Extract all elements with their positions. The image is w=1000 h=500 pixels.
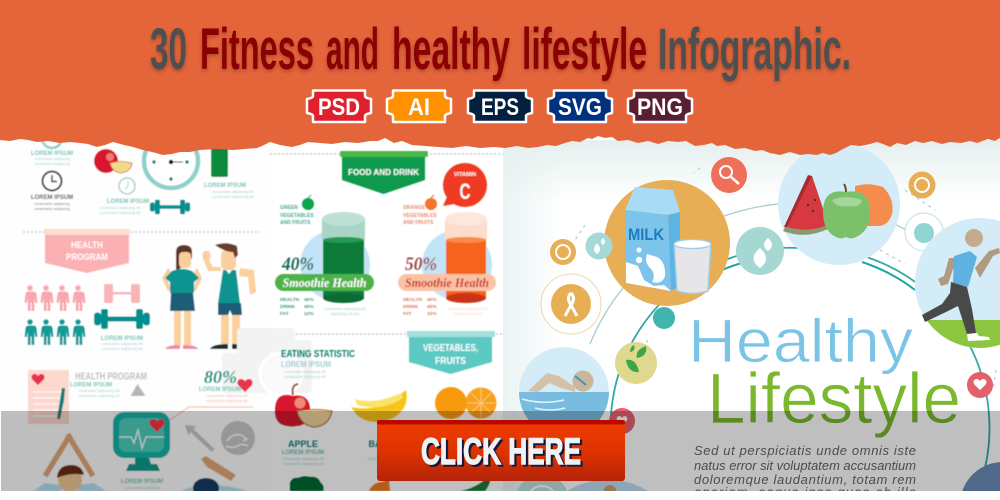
title: healthy	[392, 17, 510, 82]
text: green vegetables: GREEN	[280, 205, 298, 211]
panel: healthy lifestyle right	[503, 140, 1000, 500]
label: apple: LOREM IPSUM	[282, 450, 324, 456]
icon: heart circle small	[609, 408, 635, 434]
label: apple: APPLE	[288, 439, 318, 449]
watermark: grey camera	[222, 328, 312, 395]
badge: EPS	[468, 90, 532, 122]
button: click here	[377, 420, 625, 481]
text: orange vegetables: AND FRUITS	[403, 220, 434, 226]
panel: food and drink middle	[270, 151, 503, 491]
artwork collage	[0, 128, 1000, 500]
heading: health program: HEALTH PROGRAM	[75, 372, 147, 382]
heading: health program: consectetur adipiscing elit	[78, 394, 120, 398]
lorem label three: consectetur adipiscing elit	[99, 206, 141, 210]
icon: oranges	[435, 387, 496, 419]
heading: eating statistic: LOREM IPSUM	[281, 360, 331, 369]
banner: health program: HEALTH	[71, 240, 103, 250]
table: green stats: FAT	[280, 311, 289, 317]
heading: eating statistic: consectetur adipiscing elit	[284, 375, 326, 379]
outer thin ring	[590, 203, 920, 344]
icons: teal people	[25, 319, 86, 345]
banner: vegetables fruits: VEGETABLES,	[423, 343, 478, 354]
lorem label three: consectetur adipiscing elit	[99, 211, 141, 215]
circle: bottom blue figure	[567, 480, 648, 491]
badge: AI	[387, 90, 451, 122]
icon: apple with slice	[94, 149, 132, 173]
lorem label one: LOREM IPSUM	[31, 151, 73, 157]
label: apple	[282, 439, 324, 466]
figure: man	[202, 243, 256, 349]
table: green stats: 12%	[304, 311, 314, 317]
heading: health program: LOREM IPSUM	[70, 382, 112, 388]
icon: teal dumbbell	[94, 309, 150, 329]
table: green stats: 40%	[304, 297, 314, 303]
figure: swimmer	[528, 370, 594, 392]
top teal ring fragment	[41, 141, 63, 150]
stat: 50 percent: 50%	[405, 254, 437, 275]
heading: eating statistic: EATING STATISTIC	[281, 349, 355, 360]
icon: banana	[351, 390, 407, 422]
title: lifestyle	[522, 17, 647, 82]
torn orange header	[0, 0, 1000, 155]
badge: PSD	[307, 90, 371, 122]
pill: orange smoothie health: Smoothie Health	[405, 275, 489, 290]
title: Infographic.	[658, 17, 851, 82]
icon: watermelon	[783, 175, 830, 235]
table: orange stats: 45%	[427, 304, 437, 310]
label: apple: consectetur adipiscing elit	[282, 457, 324, 461]
lorem label six: consectetur adipiscing	[124, 486, 160, 490]
badge: AI: AI	[408, 94, 430, 121]
banner: food and drink	[340, 151, 428, 194]
stat: 80 percent: consectetur adipiscing elit	[206, 394, 248, 398]
table: green stats	[280, 297, 366, 317]
title: Fitness	[200, 17, 314, 82]
icon: large wall clock	[141, 150, 201, 191]
table: orange stats: consectetur adipiscing elit	[447, 307, 489, 311]
text block: lorem paragraph: aperiam, eaque ipsa quae ab illo	[694, 484, 916, 500]
badge: SVG: SVG	[558, 94, 602, 121]
icon: notepad and pen	[28, 370, 69, 424]
figure: yoga man	[33, 436, 106, 492]
icon: swim circle	[221, 421, 255, 455]
table: green stats: adipiscing elit sed	[331, 312, 359, 316]
stat: 80 percent: consectetur adipiscing elit	[206, 399, 248, 403]
banner: health program: PROGRAM	[66, 252, 108, 262]
text: orange vegetables: ORANGE	[403, 205, 426, 211]
table: orange stats: HEALTH	[403, 297, 423, 303]
icon: milk carton: MILK	[628, 225, 665, 244]
circle: milk	[604, 180, 730, 306]
callout: vitamin C: VITAMIN	[454, 172, 476, 178]
stat: 80 percent: 80%	[204, 367, 237, 387]
text block: lorem paragraph: natus error sit voluptatem accusantium	[694, 458, 916, 473]
chart: green smoothie glass	[300, 212, 370, 303]
lorem label five: consectetur adipiscing elit	[101, 347, 143, 351]
text: lifestyle: Lifestyle	[707, 360, 961, 439]
icon: grey triangle	[130, 384, 146, 396]
label: apple: consectetur adipiscing elit	[282, 462, 324, 466]
circle: fruit	[778, 143, 900, 265]
icon: small clock	[119, 178, 135, 194]
icon: coin left	[550, 239, 576, 265]
text: orange vegetables	[403, 205, 437, 226]
lorem label five: consectetur adipiscing elit	[101, 342, 143, 346]
table: orange stats: adipiscing elit sed	[454, 312, 482, 316]
heading: health program	[70, 372, 147, 398]
text: healthy: Healthy	[688, 307, 914, 375]
lorem label two	[31, 195, 73, 211]
lorem label three: LOREM IPSUM	[107, 199, 149, 205]
table: orange stats: 40%	[427, 297, 437, 303]
icon: red apple	[275, 384, 332, 427]
button label: CLICK HERE	[421, 431, 581, 472]
badge: EPS: EPS	[481, 94, 519, 121]
icon: green fruit	[302, 195, 314, 210]
text block: lorem paragraph: doloremque laudantium, totam rem	[694, 472, 916, 487]
heading: eating statistic: consectetur adipiscing elit	[284, 370, 326, 374]
table: green stats: consectetur adipiscing elit	[324, 307, 366, 311]
icon: orange fruit	[425, 195, 437, 210]
icon: orange fruit large	[855, 184, 893, 226]
icon: dark clock	[42, 172, 62, 190]
icon: carrot	[369, 477, 394, 491]
stat: 40 percent: 40%	[281, 254, 314, 275]
lorem label six	[121, 479, 163, 490]
icon: pink dumbbell	[104, 284, 140, 303]
table: orange stats: 15%	[427, 311, 437, 317]
icons: pink people	[25, 285, 86, 311]
badge: PNG: PNG	[637, 94, 683, 121]
heading: health program: consectetur adipiscing elit	[78, 389, 120, 393]
banner: food and drink: FOOD AND DRINK	[348, 168, 419, 177]
label: banana: consectetur adipiscing elit	[367, 457, 409, 461]
node: teal	[653, 307, 675, 329]
lorem label one: consectetur adipiscing	[34, 162, 70, 166]
callout: vitamin C	[443, 163, 487, 207]
lorem label one: consectetur adipiscing	[34, 157, 70, 161]
grey overlay strip	[1, 411, 1000, 491]
text block: lorem paragraph: Sed ut perspiciatis unde omnis iste	[694, 443, 916, 458]
label: banana	[367, 439, 409, 461]
table: green stats: DRINK	[280, 304, 296, 310]
title: 30	[150, 17, 187, 82]
lorem label four	[204, 183, 254, 199]
lorem label two: consectetur adipiscing	[34, 202, 70, 206]
icon: heart monitor	[113, 412, 170, 471]
icon: heart circle right	[967, 372, 993, 398]
stat: 80 percent: LOREM IPSUM	[199, 387, 241, 393]
icon: grey arrow	[185, 425, 214, 452]
lorem label two: LOREM IPSUM	[31, 195, 73, 201]
icon: coin right	[908, 172, 936, 198]
lorem label six: LOREM IPSUM	[121, 479, 163, 485]
icon: water circle	[736, 227, 784, 275]
table: green stats: HEALTH	[280, 297, 300, 303]
text: orange vegetables: VEGETABLES	[403, 213, 437, 219]
icon: green apple	[823, 184, 870, 238]
table: orange stats	[403, 297, 489, 317]
circle: bottom teal ring	[517, 474, 567, 491]
banner: health program	[44, 229, 130, 273]
icon: glass of milk	[674, 240, 711, 294]
icon: leaf circle	[615, 342, 657, 384]
figure: woman	[162, 245, 202, 349]
title	[150, 17, 851, 82]
circle: bottom right blue	[962, 462, 1000, 491]
pill: green smoothie health: Smoothie Health	[282, 275, 366, 290]
badge: PSD: PSD	[318, 94, 360, 121]
banner: vegetables fruits: FRUITS	[435, 356, 466, 367]
lorem label five	[101, 336, 143, 351]
badges row	[307, 90, 692, 122]
table: green stats: 40%	[304, 304, 314, 310]
text: green vegetables: AND FRUITS	[280, 220, 311, 226]
circle: runner	[915, 218, 1000, 348]
text block: lorem paragraph	[694, 443, 916, 500]
lorem label four: consectetur adipiscing elit	[212, 190, 254, 194]
chart: orange smoothie glass	[422, 212, 492, 303]
text: green vegetables	[280, 205, 314, 226]
callout: vitamin C: C	[460, 179, 471, 204]
lorem label two: consectetur adipiscing	[34, 207, 70, 211]
title: and	[326, 17, 379, 82]
lorem label five: LOREM IPSUM	[101, 336, 143, 342]
badge: SVG	[548, 90, 612, 122]
stat: 80 percent	[199, 367, 253, 403]
figure: stretching person	[182, 456, 248, 491]
figure: runner	[922, 229, 1000, 341]
circle: swimmer	[515, 347, 615, 442]
label: banana: BANANA	[368, 439, 408, 449]
text: green vegetables: VEGETABLES	[280, 213, 314, 219]
teal ring	[611, 248, 989, 491]
banner: vegetables fruits	[407, 331, 495, 374]
heading: eating statistic	[281, 349, 355, 379]
panel: fitness infographic left	[22, 141, 312, 491]
icon: cucumber	[460, 477, 490, 491]
node: ring	[905, 213, 943, 251]
icon: broccoli	[290, 476, 324, 491]
lorem label four: consectetur adipiscing elit	[212, 195, 254, 199]
icon: small teal dumbbell	[150, 200, 190, 214]
lorem label four: LOREM IPSUM	[204, 183, 246, 189]
table: orange stats: FAT	[403, 311, 412, 317]
green glass fragment	[211, 148, 228, 177]
lorem label one	[31, 151, 73, 166]
icon: magnifier circle	[711, 157, 747, 193]
table: orange stats: DRINK	[403, 304, 419, 310]
icon: milk carton	[625, 187, 680, 291]
lorem label three	[99, 199, 149, 215]
icon: droplet circle	[586, 232, 612, 260]
icon: ribbon circle	[541, 274, 601, 334]
